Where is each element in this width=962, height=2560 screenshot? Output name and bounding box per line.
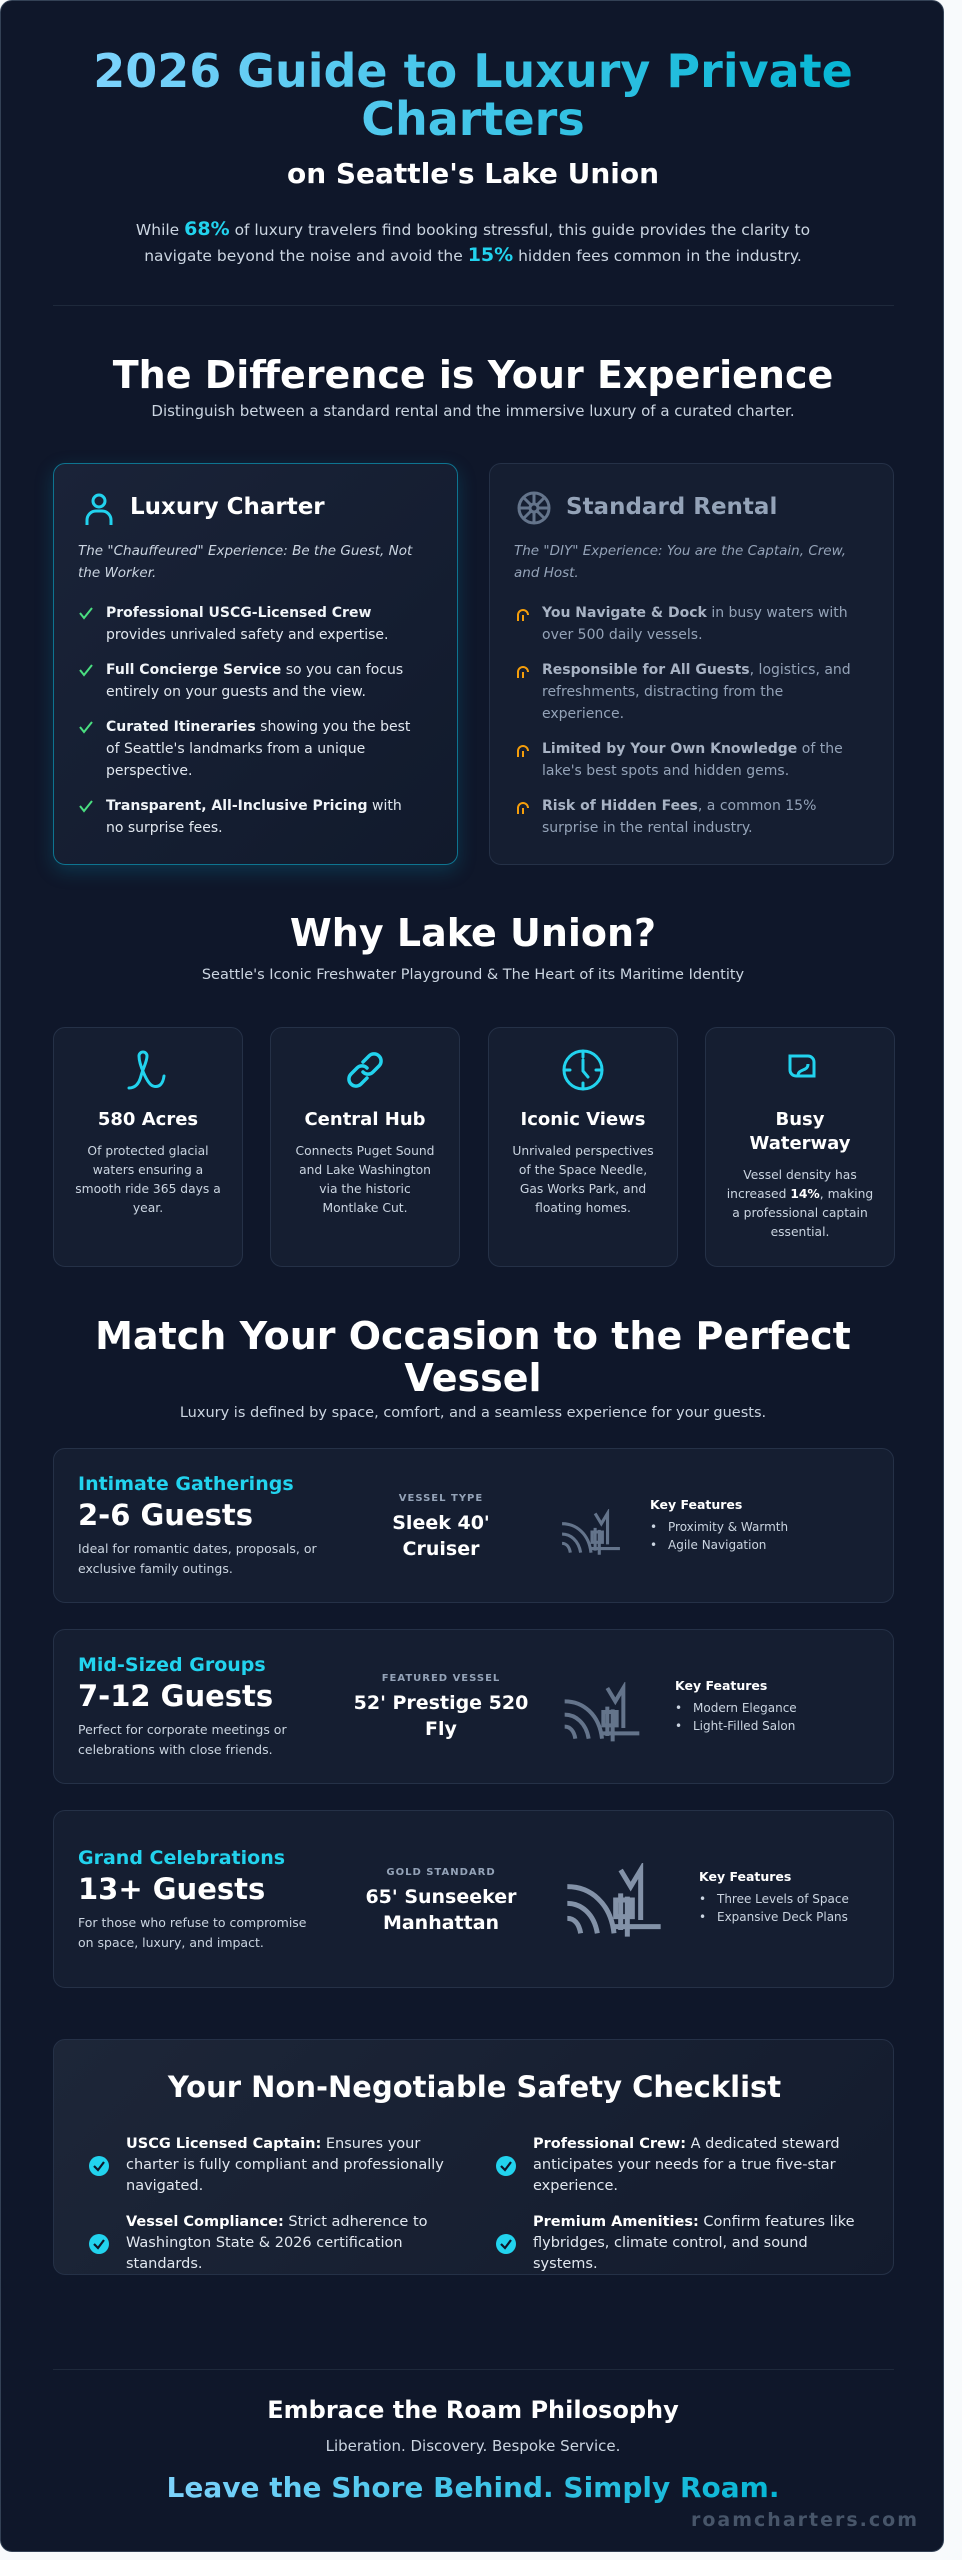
title bbox=[93, 44, 853, 146]
panel: safety checklist bbox=[53, 2039, 894, 2275]
vessel card: intimate: VESSEL TYPE bbox=[399, 1493, 483, 1504]
panel: standard rental: Limited by Your Own Knowledge of the lake's best spots and hidden gems. bbox=[542, 741, 843, 779]
vessel card: intimate: Sleek 40' bbox=[392, 1512, 490, 1534]
vessel card: intimate: Intimate Gatherings bbox=[78, 1473, 294, 1495]
heading: why lake union: Why Lake Union? bbox=[290, 911, 656, 955]
checklist item: captain: USCG Licensed Captain: Ensures your charter is fully compliant and professionally navigated. bbox=[126, 2136, 444, 2194]
panel: luxury charter: Curated Itineraries showing you the best of Seattle's landmarks from a unique perspective. bbox=[106, 719, 410, 779]
intro text: While 68% of luxury travelers find booking stressful, this guide provides the clarity to bbox=[136, 218, 810, 240]
checklist item: compliance: Vessel Compliance: Strict adherence to Washington State & 2026 certification standards. bbox=[126, 2214, 428, 2272]
heading: match occasion bbox=[95, 1314, 851, 1421]
stat: 580 acres: 580 Acres bbox=[98, 1109, 198, 1130]
panel: luxury charter bbox=[53, 463, 458, 865]
icon: vessel small bbox=[562, 1509, 620, 1555]
vessel card: intimate: Agile Navigation bbox=[668, 1538, 766, 1552]
panel: luxury charter: Transparent, All-Inclusive Pricing with no surprise fees. bbox=[106, 798, 402, 836]
title: 2026 Guide to Luxury Private bbox=[93, 44, 853, 98]
vessel card: intimate: Proximity & Warmth bbox=[668, 1520, 788, 1534]
icon: person bbox=[86, 494, 112, 525]
vessel card: grand: Grand Celebrations bbox=[78, 1847, 285, 1869]
checklist item: amenities: Premium Amenities: Confirm features like flybridges, climate control, and sound systems. bbox=[533, 2214, 855, 2272]
footer call to action: Leave the Shore Behind. Simply Roam. bbox=[167, 2471, 779, 2504]
stat: iconic views bbox=[488, 1027, 678, 1267]
stat: busy waterway: Busy bbox=[776, 1109, 824, 1130]
vessel card: intimate: Key Features bbox=[650, 1497, 742, 1512]
panel: standard rental: You Navigate & Dock in busy waters with over 500 daily vessels. bbox=[542, 605, 848, 643]
title: Charters bbox=[361, 92, 585, 146]
stat: 580 acres: Of protected glacial waters ensuring a smooth ride 365 days a year. bbox=[75, 1144, 221, 1215]
footer heading: Embrace the Roam Philosophy bbox=[267, 2396, 679, 2424]
stat: busy waterway: Vessel density has increased 14%, making a professional captain essential. bbox=[727, 1168, 873, 1239]
vessel card: grand: GOLD STANDARD bbox=[386, 1867, 496, 1878]
icon: vessel large bbox=[567, 1863, 661, 1937]
vessel card: grand: For those who refuse to compromise on space, luxury, and impact. bbox=[78, 1915, 306, 1950]
panel: luxury charter: Full Concierge Service so you can focus entirely on your guests and the view. bbox=[106, 662, 403, 700]
vessel card: mid-sized: Key Features bbox=[675, 1678, 767, 1693]
stat: iconic views: Unrivaled perspectives of the Space Needle, Gas Works Park, and floating homes. bbox=[512, 1144, 654, 1215]
stat: 580 acres bbox=[53, 1027, 243, 1267]
vessel card: mid-sized: Light-Filled Salon bbox=[693, 1719, 795, 1733]
heading: match occasion: Luxury is defined by space, comfort, and a seamless experience for your guests. bbox=[180, 1405, 766, 1421]
stat: central hub: Connects Puget Sound and Lake Washington via the historic Montlake Cut. bbox=[296, 1144, 434, 1215]
panel: standard rental: Responsible for All Guests, logistics, and refreshments, distracting from the experience. bbox=[542, 662, 851, 722]
heading: difference: Distinguish between a standard rental and the immersive luxury of a curated charter. bbox=[151, 402, 795, 420]
stat: busy waterway: Waterway bbox=[749, 1133, 850, 1154]
footer tagline: Liberation. Discovery. Bespoke Service. bbox=[326, 2437, 620, 2455]
panel: safety checklist: Your Non-Negotiable Safety Checklist bbox=[168, 2070, 781, 2104]
vessel card: grand bbox=[53, 1810, 894, 1988]
icon: helm wheel bbox=[518, 492, 550, 524]
stat: busy waterway bbox=[705, 1027, 895, 1267]
checklist item: crew: Professional Crew: A dedicated steward anticipates your needs for a true five-star experience. bbox=[533, 2136, 840, 2194]
vessel card: intimate: 2-6 Guests bbox=[78, 1498, 253, 1532]
vessel card: grand: Expansive Deck Plans bbox=[717, 1910, 848, 1924]
vessel card: mid-sized: 52' Prestige 520 bbox=[354, 1692, 528, 1714]
vessel card: grand: 13+ Guests bbox=[78, 1872, 265, 1906]
panel: standard rental bbox=[489, 463, 894, 865]
vessel card: mid-sized: 7-12 Guests bbox=[78, 1679, 273, 1713]
icon: vessel medium bbox=[564, 1682, 640, 1742]
heading: why lake union bbox=[202, 911, 744, 983]
heading: match occasion: Vessel bbox=[404, 1356, 542, 1400]
panel: standard rental: The "DIY" Experience: You are the Captain, Crew, and Host. bbox=[514, 543, 846, 581]
heading: difference bbox=[112, 353, 833, 420]
vessel card: intimate bbox=[53, 1448, 894, 1603]
panel: luxury charter: The "Chauffeured" Experience: Be the Guest, Not the Worker. bbox=[78, 543, 412, 581]
footer website: roamcharters.com bbox=[691, 2509, 919, 2531]
intro text bbox=[136, 218, 810, 266]
stat: central hub bbox=[270, 1027, 460, 1267]
vessel card: mid-sized: FEATURED VESSEL bbox=[382, 1673, 500, 1684]
vessel card: intimate: Cruiser bbox=[403, 1538, 479, 1560]
heading: why lake union: Seattle's Iconic Freshwater Playground & The Heart of its Maritime Identity bbox=[202, 967, 744, 983]
intro text: navigate beyond the noise and avoid the 15% hidden fees common in the industry. bbox=[144, 244, 802, 266]
vessel card: mid-sized: Modern Elegance bbox=[693, 1701, 797, 1715]
vessel card: grand: Manhattan bbox=[383, 1912, 499, 1934]
panel: standard rental: Standard Rental bbox=[566, 494, 777, 520]
panel: luxury charter: Professional USCG-Licensed Crew provides unrivaled safety and expertise. bbox=[106, 605, 388, 643]
vessel card: mid-sized bbox=[53, 1629, 894, 1784]
vessel card: mid-sized: Mid-Sized Groups bbox=[78, 1654, 266, 1676]
vessel card: intimate: Ideal for romantic dates, proposals, or exclusive family outings. bbox=[78, 1541, 317, 1576]
vessel card: grand: 65' Sunseeker bbox=[365, 1886, 517, 1908]
vessel card: mid-sized: Perfect for corporate meetings or celebrations with close friends. bbox=[78, 1722, 287, 1757]
heading: difference: The Difference is Your Experience bbox=[113, 353, 833, 397]
panel: luxury charter: Luxury Charter bbox=[130, 494, 325, 520]
stat: iconic views: Iconic Views bbox=[520, 1109, 646, 1130]
panel: standard rental: Risk of Hidden Fees, a common 15% surprise in the rental industry. bbox=[542, 798, 816, 836]
vessel card: mid-sized: Fly bbox=[425, 1718, 457, 1740]
stat: central hub: Central Hub bbox=[304, 1109, 426, 1130]
subtitle: on Seattle's Lake Union bbox=[287, 157, 659, 190]
vessel card: grand: Three Levels of Space bbox=[717, 1892, 849, 1906]
vessel card: grand: Key Features bbox=[699, 1869, 791, 1884]
heading: match occasion: Match Your Occasion to the Perfect bbox=[95, 1314, 851, 1358]
